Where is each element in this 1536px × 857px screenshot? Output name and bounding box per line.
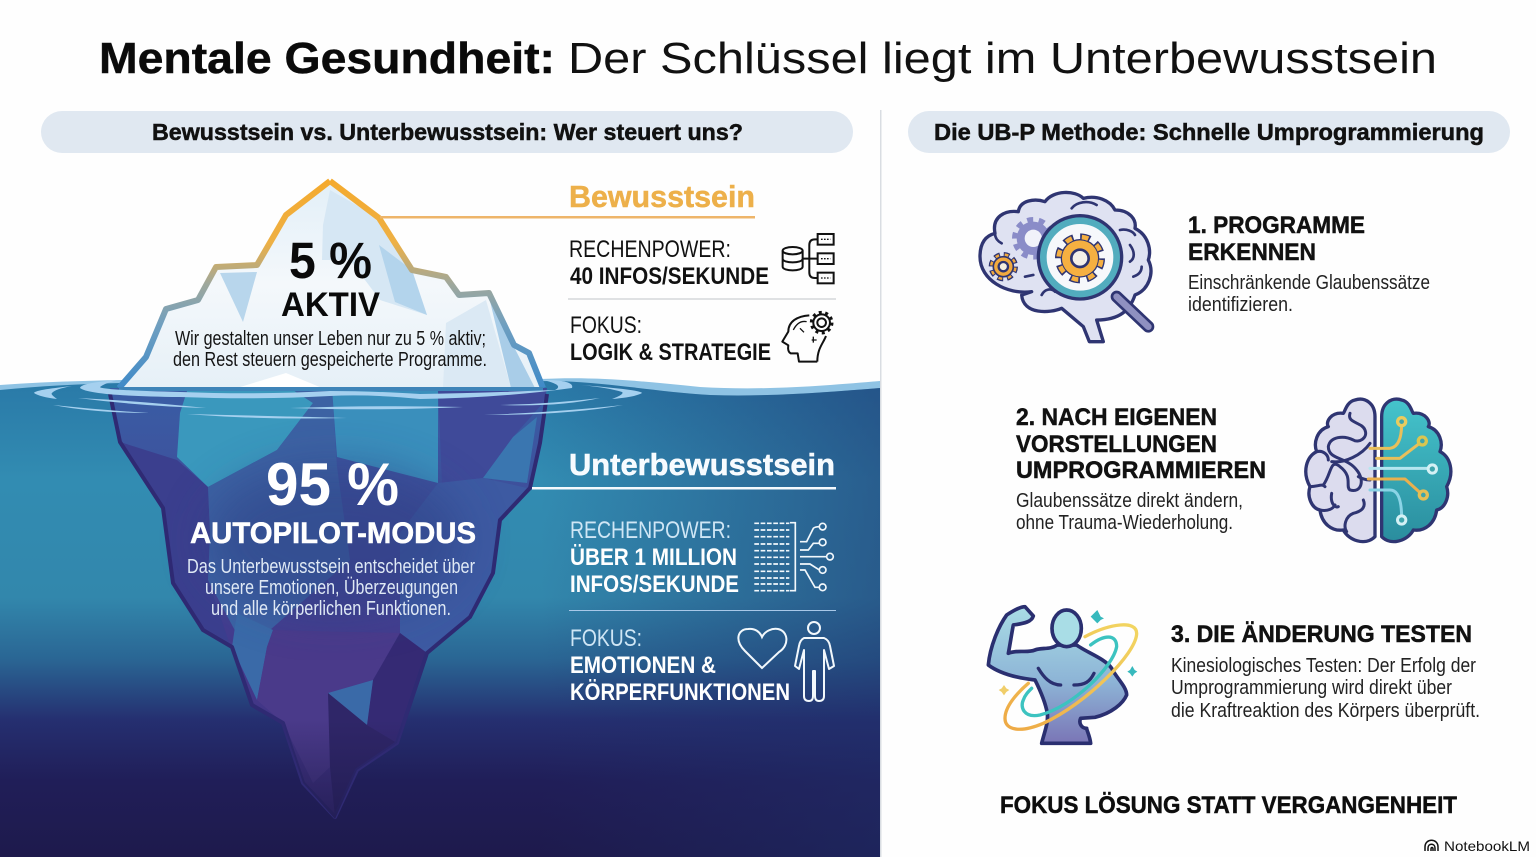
text block: step 3: Umprogrammierung wird direkt über	[1171, 677, 1452, 699]
text block: 95 % autopilot: 95 %	[266, 451, 399, 518]
stat: Fokus Unterbewusstsein: FOKUS:	[570, 625, 642, 652]
stat: Fokus Bewusstsein: LOGIK & STRATEGIE	[570, 339, 771, 366]
ocean	[0, 381, 880, 857]
text block: step 3	[1171, 621, 1480, 722]
heading: Unterbewusstsein: Unterbewusstsein	[569, 447, 835, 482]
text block: step 3: 3. DIE ÄNDERUNG TESTEN	[1171, 621, 1472, 648]
panel: iceberg and consciousness comparison	[0, 111, 880, 857]
text block: 95 % autopilot: Das Unterbewusstsein entscheidet über	[187, 556, 475, 578]
section heading pill: right	[908, 111, 1510, 153]
icon: brain half circuit	[1306, 399, 1451, 542]
stat: Rechenpower Bewusstsein: RECHENPOWER:	[569, 236, 731, 263]
stat: Fokus Bewusstsein: FOKUS:	[570, 312, 642, 339]
title: Mentale Gesundheit:	[99, 34, 555, 83]
iceberg above water	[119, 181, 543, 391]
text block: step 2	[1016, 404, 1266, 534]
water ripples	[34, 380, 642, 418]
stat: Rechenpower Bewusstsein: 40 INFOS/SEKUNDE	[570, 263, 769, 290]
text block: step 1: ERKENNEN	[1188, 239, 1316, 266]
divider	[569, 610, 836, 611]
title	[99, 34, 1437, 83]
text block: 95 % autopilot	[187, 451, 476, 620]
text block: step 1: identifizieren.	[1188, 294, 1293, 316]
NotebookLM logo: NotebookLM	[1444, 838, 1530, 854]
section heading pill: right: Die UB-P Methode: Schnelle Umprogrammierung	[934, 119, 1484, 145]
heading: Bewusstsein: Bewusstsein	[569, 179, 755, 214]
stat: Fokus Unterbewusstsein: KÖRPERFUNKTIONEN	[570, 679, 790, 706]
text block: step 2: 2. NACH EIGENEN	[1016, 404, 1217, 431]
text block: step 1: 1. PROGRAMME	[1188, 212, 1365, 239]
text block: step 2: Glaubenssätze direkt ändern,	[1016, 490, 1243, 512]
panel: UB-P Methode	[908, 111, 1530, 854]
column divider	[880, 110, 882, 857]
text block: step 1	[1188, 212, 1430, 316]
text block: 5 % aktiv	[173, 232, 487, 371]
text block: step 1: Einschränkende Glaubenssätze	[1188, 272, 1430, 294]
connector line: Bewusstsein	[380, 216, 755, 218]
stat: Rechenpower Unterbewusstsein	[570, 517, 739, 598]
stat: Rechenpower Bewusstsein	[569, 236, 769, 290]
stat: Rechenpower Unterbewusstsein: INFOS/SEKUNDE	[570, 571, 739, 598]
stat: Fokus Unterbewusstsein	[570, 625, 790, 706]
connector line: Unterbewusstsein	[532, 487, 836, 490]
icon: person	[795, 622, 834, 701]
text block: step 3: die Kraftreaktion des Körpers überprüft.	[1171, 700, 1480, 722]
text block: step 2: ohne Trauma-Wiederholung.	[1016, 512, 1233, 534]
icon: data lines to network	[754, 523, 833, 591]
text block: 5 % aktiv: AKTIV	[281, 286, 380, 324]
closing statement: FOKUS LÖSUNG STATT VERGANGENHEIT	[1000, 792, 1457, 819]
stat: Rechenpower Unterbewusstsein: RECHENPOWER:	[570, 517, 731, 544]
text block: 95 % autopilot: AUTOPILOT-MODUS	[190, 517, 476, 550]
title: Der Schlüssel liegt im Unterbewusstsein	[568, 34, 1437, 83]
text block: step 3: Kinesiologisches Testen: Der Erfolg der	[1171, 655, 1476, 677]
icon: head with gear	[782, 312, 832, 362]
section heading pill: left: Bewusstsein vs. Unterbewusstsein: Wer steuert uns?	[152, 119, 743, 145]
divider	[568, 298, 836, 300]
text block: step 2: UMPROGRAMMIEREN	[1016, 457, 1266, 484]
section heading pill: left	[41, 111, 853, 153]
icon: strong body with orbit	[988, 607, 1137, 743]
text block: 5 % aktiv: Wir gestalten unser Leben nur zu 5 % aktiv;	[175, 328, 486, 350]
icon: brain with magnifier	[980, 192, 1151, 342]
stat: Fokus Bewusstsein	[570, 312, 771, 366]
text block: 95 % autopilot: und alle körperlichen Funktionen.	[211, 598, 451, 620]
text block: 95 % autopilot: unsere Emotionen, Überzeugungen	[205, 577, 458, 599]
icon: heart	[738, 629, 786, 668]
text block: 5 % aktiv: den Rest steuern gespeicherte Programme.	[173, 349, 487, 371]
icon: database network	[783, 234, 834, 283]
water surface band	[0, 378, 880, 400]
stat: Rechenpower Unterbewusstsein: ÜBER 1 MILLION	[570, 544, 737, 571]
iceberg underwater	[110, 388, 547, 819]
text block: step 2: VORSTELLUNGEN	[1016, 431, 1217, 458]
stat: Fokus Unterbewusstsein: EMOTIONEN &	[570, 652, 716, 679]
text block: 5 % aktiv: 5 %	[289, 232, 372, 289]
